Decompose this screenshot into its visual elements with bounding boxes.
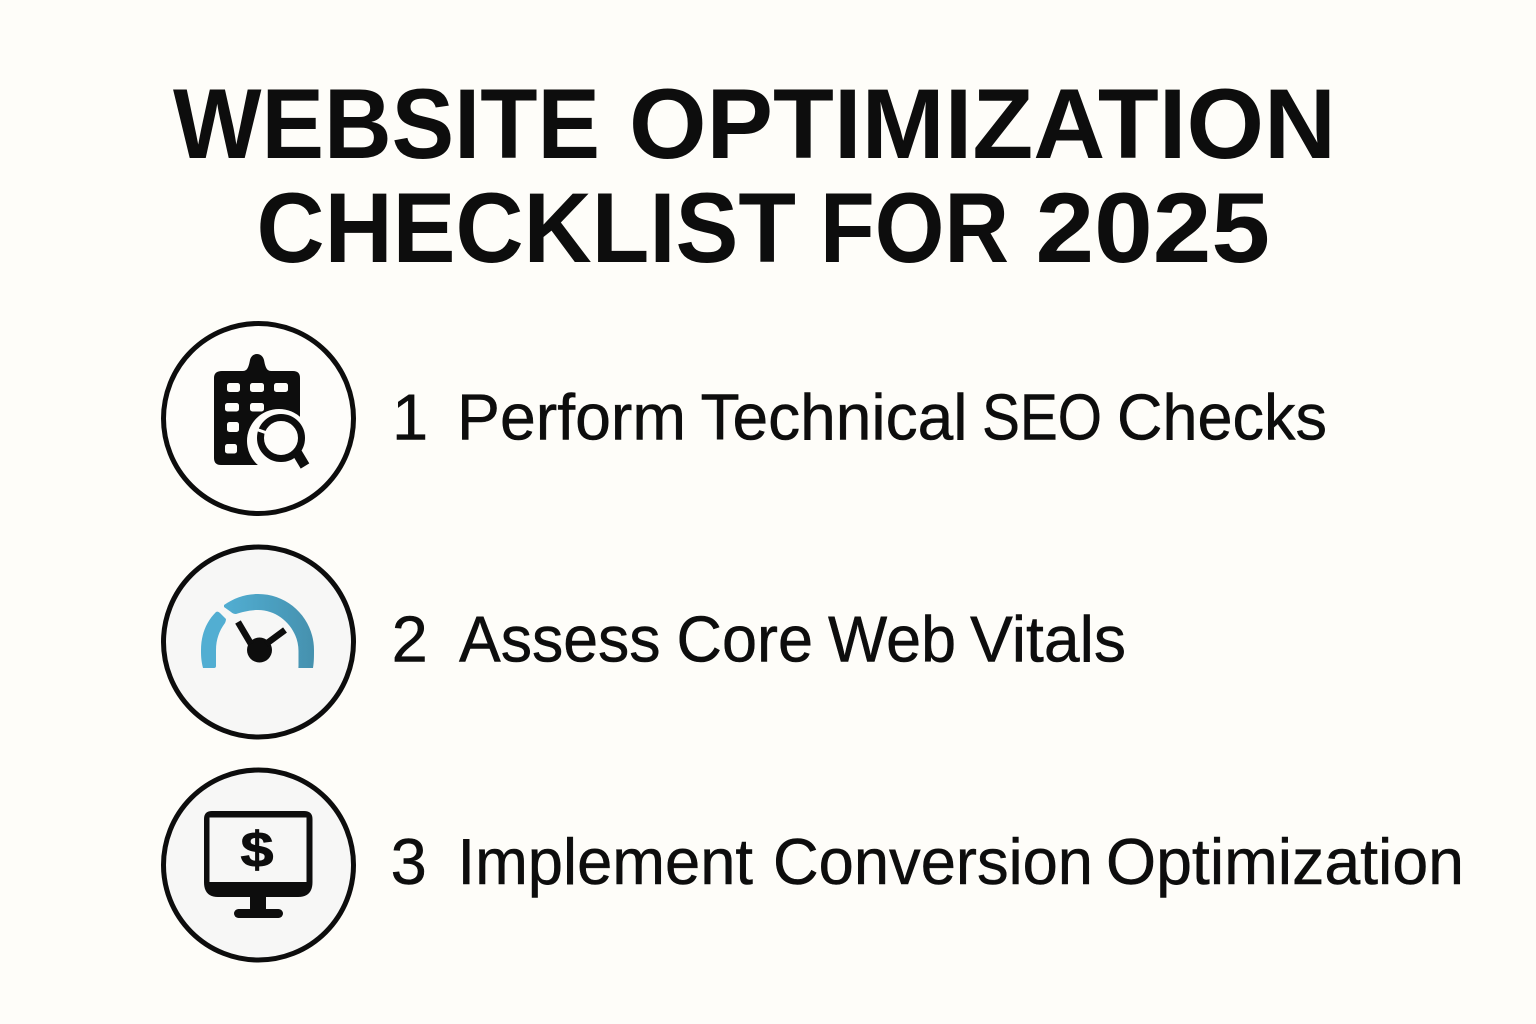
label 3 — [391, 825, 1464, 898]
label 1: SEO — [982, 380, 1102, 454]
icon 2: speedometer gauge — [164, 547, 354, 737]
label 2: 2 — [392, 602, 428, 676]
label 3: Optimization — [1106, 825, 1464, 898]
label 2: Core — [676, 602, 813, 676]
label 1 — [392, 380, 1327, 454]
icon 3: monitor with dollar sign: $ — [240, 822, 274, 878]
label 1: Perform — [457, 380, 686, 454]
label 3: Implement — [458, 825, 753, 898]
label 2 — [392, 602, 1126, 676]
title: FOR — [820, 172, 1009, 283]
title: CHECKLIST — [256, 172, 796, 283]
title: 2025 — [1036, 172, 1270, 283]
title: OPTIMIZATION — [629, 68, 1336, 179]
icon 1: document grid with magnifying glass — [164, 324, 354, 514]
title: WEBSITE — [173, 68, 600, 179]
label 1: Technical — [700, 380, 968, 454]
label 1: Checks — [1117, 380, 1327, 454]
label 2: Assess — [459, 602, 660, 676]
label 3: Conversion — [773, 825, 1093, 898]
label 1: 1 — [392, 380, 428, 454]
icon 3: monitor with dollar sign — [164, 770, 354, 960]
label 2: Web — [828, 602, 956, 676]
item 1: technical SEO checks — [164, 324, 1327, 514]
item 3: conversion optimization — [164, 770, 1464, 960]
label 2: Vitals — [970, 602, 1126, 676]
item 2: core web vitals — [164, 547, 1126, 737]
title — [173, 68, 1336, 283]
label 3: 3 — [391, 825, 427, 898]
